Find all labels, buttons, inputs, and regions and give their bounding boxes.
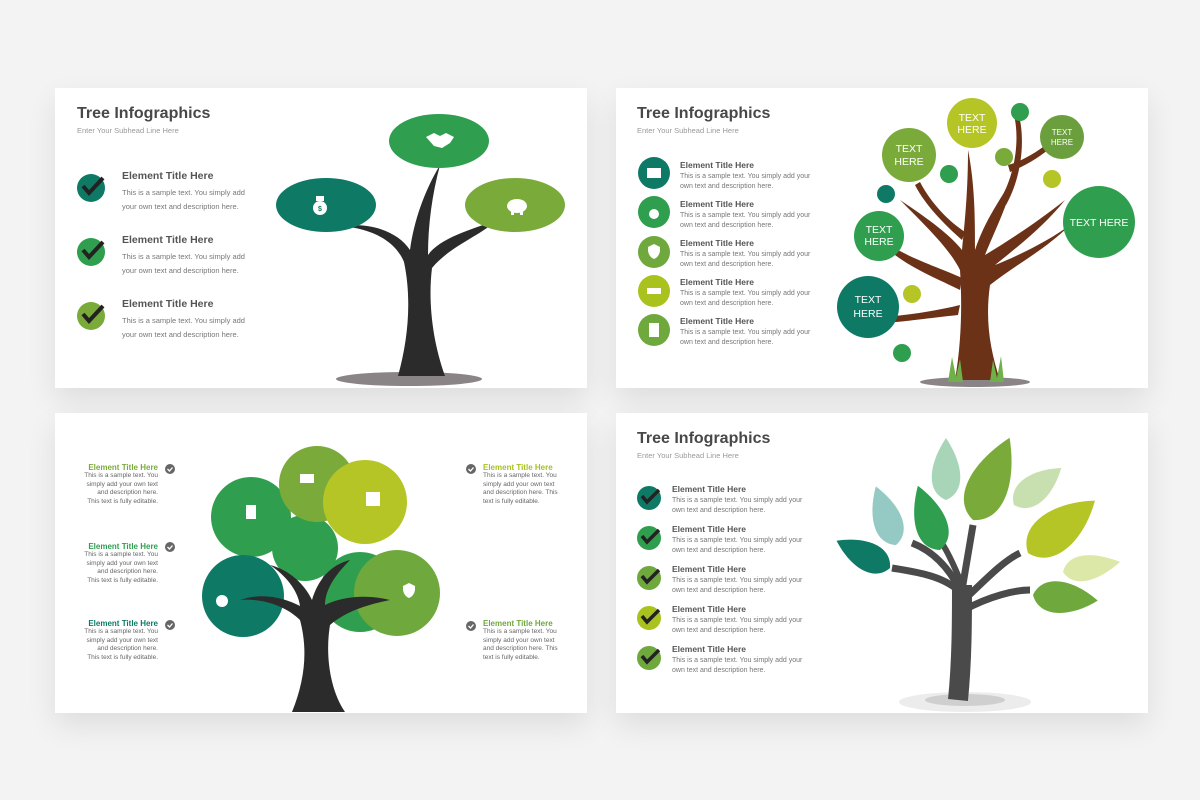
text circles: TEXT — [896, 143, 923, 155]
title: Tree Infographics — [637, 105, 770, 122]
check list: Element Title Here — [672, 564, 746, 574]
title: Tree Infographics — [77, 105, 210, 122]
check list: This is a sample text. You simply add your own text and description here. — [672, 617, 802, 634]
list item 1 — [77, 170, 245, 211]
icon list: This is a sample text. You simply add your own text and description here. — [680, 173, 810, 190]
check list: This is a sample text. You simply add your own text and description here. — [672, 537, 802, 554]
icon list: This is a sample text. You simply add your own text and description here. — [680, 329, 810, 346]
icon oval: money — [276, 178, 376, 232]
panel: slide 2 brown tree with circles — [616, 88, 1148, 388]
icon list: This is a sample text. You simply add your own text and description here. — [680, 251, 810, 268]
icon oval: piggy bank — [465, 178, 565, 232]
check list: Element Title Here — [672, 524, 746, 534]
check list: This is a sample text. You simply add your own text and description here. — [672, 497, 802, 514]
list item 2 — [77, 234, 245, 275]
icon list: Element Title Here — [680, 316, 754, 326]
text circles — [837, 98, 1135, 362]
right text 2: Element Title Here — [483, 619, 553, 628]
panel: slide 4 leaf tree — [616, 413, 1148, 713]
subhead: Enter Your Subhead Line Here — [77, 126, 179, 135]
list item 1: This is a sample text. You simply add your own text and description here. — [122, 188, 245, 211]
check list: Element Title Here — [672, 604, 746, 614]
text circles: HERE — [894, 156, 924, 168]
list item 2: Element Title Here — [122, 234, 213, 246]
tree graphic 4 — [836, 438, 1120, 712]
text circles: HERE — [864, 236, 894, 248]
title: Tree Infographics — [637, 430, 770, 447]
text circles: HERE — [853, 308, 883, 320]
left text 3: Element Title Here — [88, 619, 158, 628]
right text 2: This is a sample text. You simply add your own text and description here. This text is fully editable. — [483, 628, 558, 660]
check list: This is a sample text. You simply add your own text and description here. — [672, 577, 802, 594]
panel: slide 3 circle canopy tree — [55, 413, 587, 713]
icon list: Element Title Here — [680, 277, 754, 287]
tree graphic 1 — [276, 114, 565, 386]
check list: Element Title Here — [672, 644, 746, 654]
left text 1: Element Title Here — [88, 463, 158, 472]
subhead: Enter Your Subhead Line Here — [637, 126, 739, 135]
panel: slide 1 oval tree — [55, 88, 587, 388]
icon oval: handshake — [389, 114, 489, 168]
list item 3: Element Title Here — [122, 298, 213, 310]
text circles: TEXT — [866, 224, 893, 236]
icon list: Element Title Here — [680, 238, 754, 248]
icon oval: money: $ — [318, 206, 322, 213]
left text 2: Element Title Here — [88, 542, 158, 551]
check icons — [165, 464, 476, 631]
text circles: TEXT HERE — [1070, 217, 1128, 229]
text circles: HERE — [957, 124, 987, 136]
list item 2: This is a sample text. You simply add your own text and description here. — [122, 252, 245, 275]
list item 3: This is a sample text. You simply add your own text and description here. — [122, 316, 245, 339]
text circles: HERE — [1051, 138, 1073, 147]
tree graphic 3 — [202, 446, 440, 712]
icon list — [638, 157, 810, 346]
icon list: Element Title Here — [680, 160, 754, 170]
icon list: Element Title Here — [680, 199, 754, 209]
text circles: TEXT — [1052, 128, 1072, 137]
leaves — [830, 430, 1122, 616]
left text 2: This is a sample text. You simply add your own text and description here. This text is fully editable. — [84, 551, 158, 584]
subhead: Enter Your Subhead Line Here — [637, 451, 739, 460]
check list — [637, 484, 802, 674]
list item 1: Element Title Here — [122, 170, 213, 182]
icon list: This is a sample text. You simply add your own text and description here. — [680, 290, 810, 306]
right text 1: Element Title Here — [483, 463, 553, 472]
check list: This is a sample text. You simply add your own text and description here. — [672, 657, 802, 674]
icon list: This is a sample text. You simply add your own text and description here. — [680, 212, 810, 228]
check list: Element Title Here — [672, 484, 746, 494]
text circles: TEXT — [855, 294, 882, 306]
tree graphic 2 — [837, 98, 1135, 387]
left text 3: This is a sample text. You simply add your own text and description here. This text is fully editable. — [84, 628, 158, 660]
right text 1: This is a sample text. You simply add your own text and description here. This text is fully editable. — [483, 472, 558, 504]
left text 1: This is a sample text. You simply add your own text and description here. This text is fully editable. — [84, 472, 158, 504]
list item 3 — [77, 298, 245, 339]
text circles: TEXT — [959, 112, 986, 124]
